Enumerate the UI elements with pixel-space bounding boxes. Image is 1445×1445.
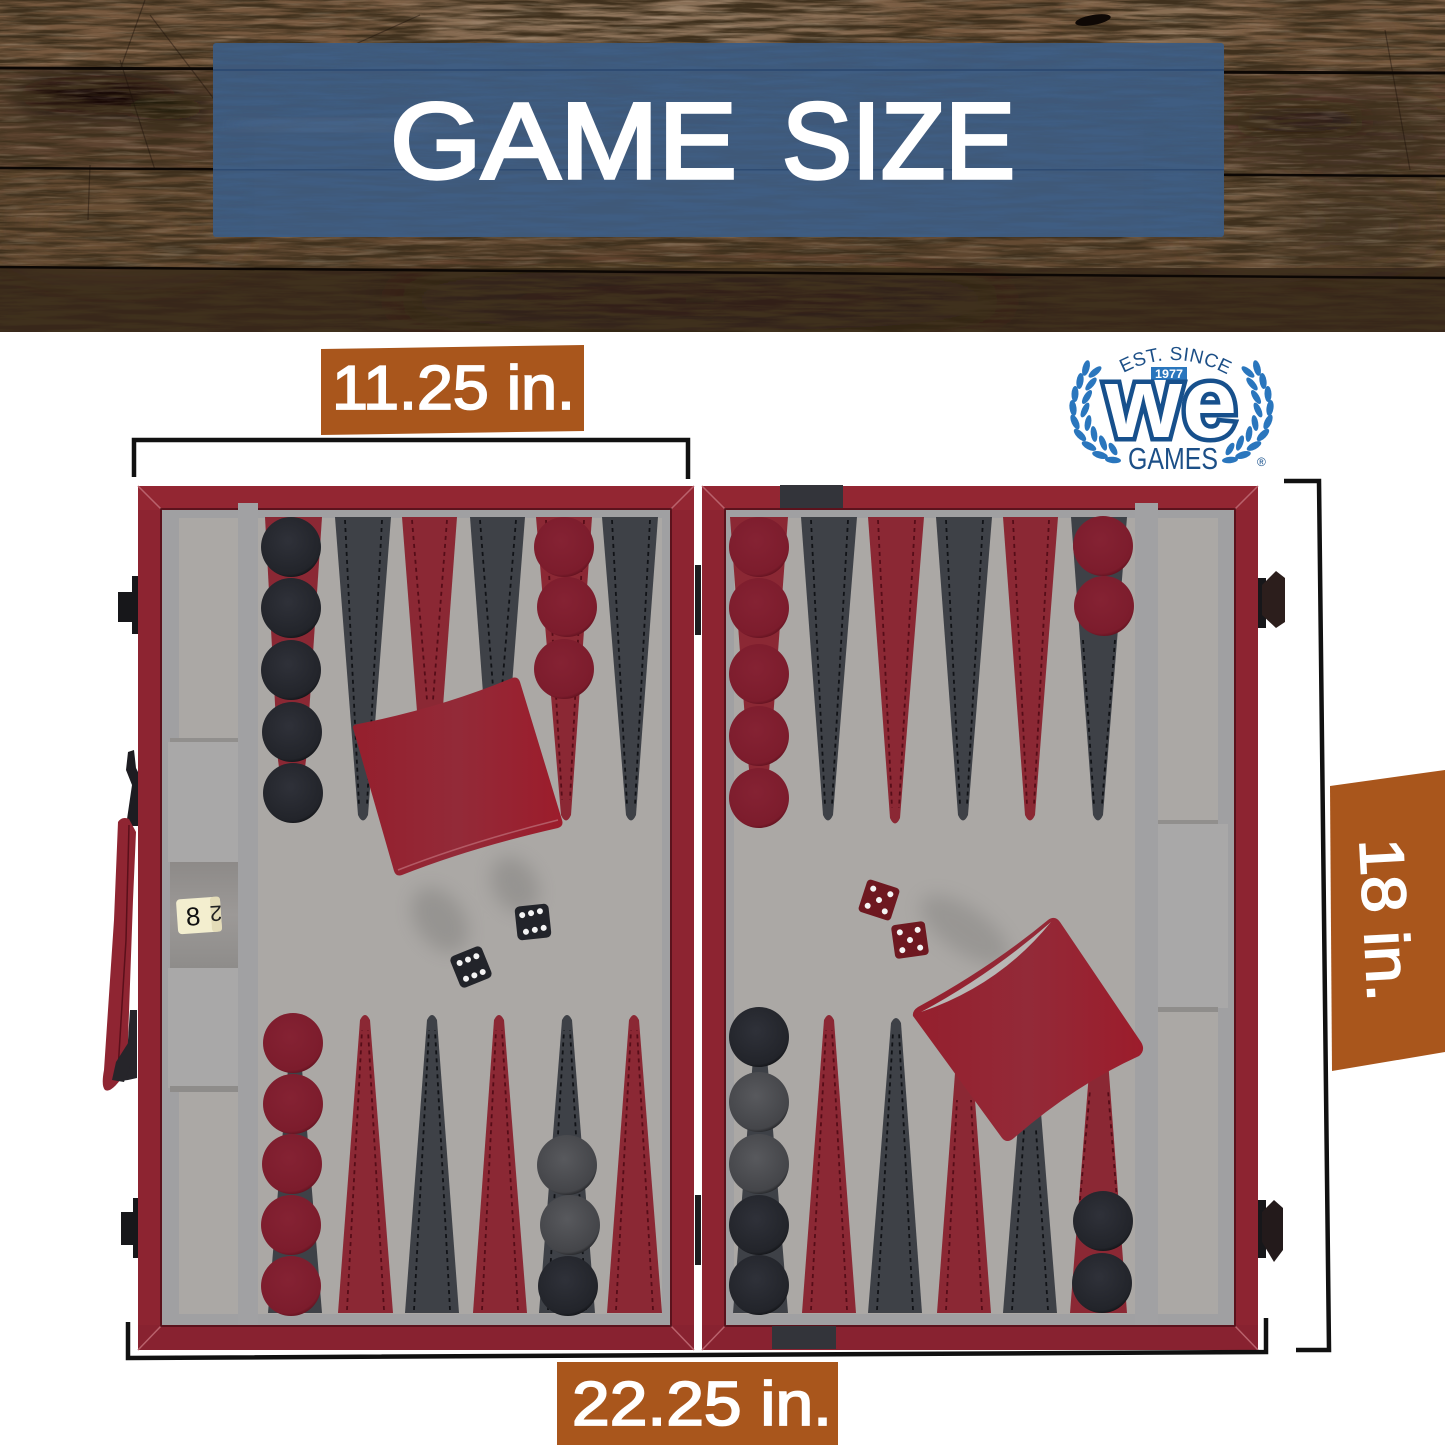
dimension label: 18 in.	[1330, 770, 1445, 1071]
right tray	[1156, 518, 1228, 1314]
top points	[265, 517, 658, 820]
top points	[730, 517, 1127, 824]
red leather frame	[702, 485, 1258, 1350]
dimension label: 18 in.: 18 in.	[1346, 837, 1423, 1003]
bottom points	[268, 1015, 662, 1313]
laurel wreath	[1068, 359, 1275, 464]
doubling die: 8	[185, 901, 201, 932]
checkers: top right-board red stack	[729, 517, 789, 828]
hinges	[695, 565, 701, 1265]
dice shadows	[400, 848, 549, 963]
bracket: board height	[1284, 481, 1329, 1350]
title	[390, 80, 1015, 201]
bracket: full width	[128, 1318, 1266, 1358]
felt rim	[162, 510, 670, 1325]
logo: WE Games	[1069, 346, 1274, 476]
dice cup	[913, 918, 1143, 1141]
dimension label: 11.25 in.	[321, 345, 584, 435]
left tray	[168, 518, 240, 1314]
checkers: bottom black	[537, 1135, 600, 1316]
divider rail	[1135, 503, 1158, 1325]
doubling die: 2	[209, 900, 223, 926]
checkers: top left black	[261, 517, 323, 823]
checkers: top red	[534, 517, 597, 699]
logo text: games: GAMES	[1128, 441, 1218, 476]
logo text: est. since: EST. SINCE	[1119, 346, 1232, 374]
felt playing surface	[726, 510, 1234, 1325]
checkers: bottom corner black	[1072, 1191, 1133, 1313]
checkers: bottom left red	[261, 1013, 323, 1316]
handle	[103, 750, 138, 1091]
checkers: bottom right-board black stack	[729, 1007, 789, 1315]
dimension label: 22.25 in.: 22.25 in.	[572, 1370, 832, 1439]
black dice	[449, 903, 552, 989]
checkers: top corner red	[1073, 516, 1134, 636]
dimension label: 11.25 in.: 11.25 in.	[332, 354, 575, 423]
title: GAME	[390, 80, 737, 201]
wood plank background	[0, 0, 1445, 332]
registered mark: ®	[1257, 455, 1266, 469]
title: SIZE	[782, 80, 1015, 201]
logo badge: 1977	[1151, 367, 1187, 381]
dice cup	[353, 678, 562, 876]
panel: right half of board	[702, 485, 1258, 1350]
panel: left half of board	[138, 486, 694, 1350]
bracket: half-board width	[134, 440, 688, 479]
title banner	[213, 43, 1224, 237]
doubling die	[176, 896, 223, 934]
bottom points	[733, 1015, 1127, 1313]
logo wordmark: we: we	[1104, 347, 1237, 459]
red dice	[858, 879, 929, 959]
left latches	[118, 576, 138, 1258]
felt playing surface	[162, 510, 670, 1325]
felt rim	[726, 510, 1234, 1325]
divider rail	[238, 503, 258, 1325]
right latches	[1258, 571, 1285, 1262]
dice shadows	[910, 882, 1020, 978]
logo badge: 1977: 1977	[1155, 369, 1183, 381]
red leather frame	[138, 486, 694, 1350]
